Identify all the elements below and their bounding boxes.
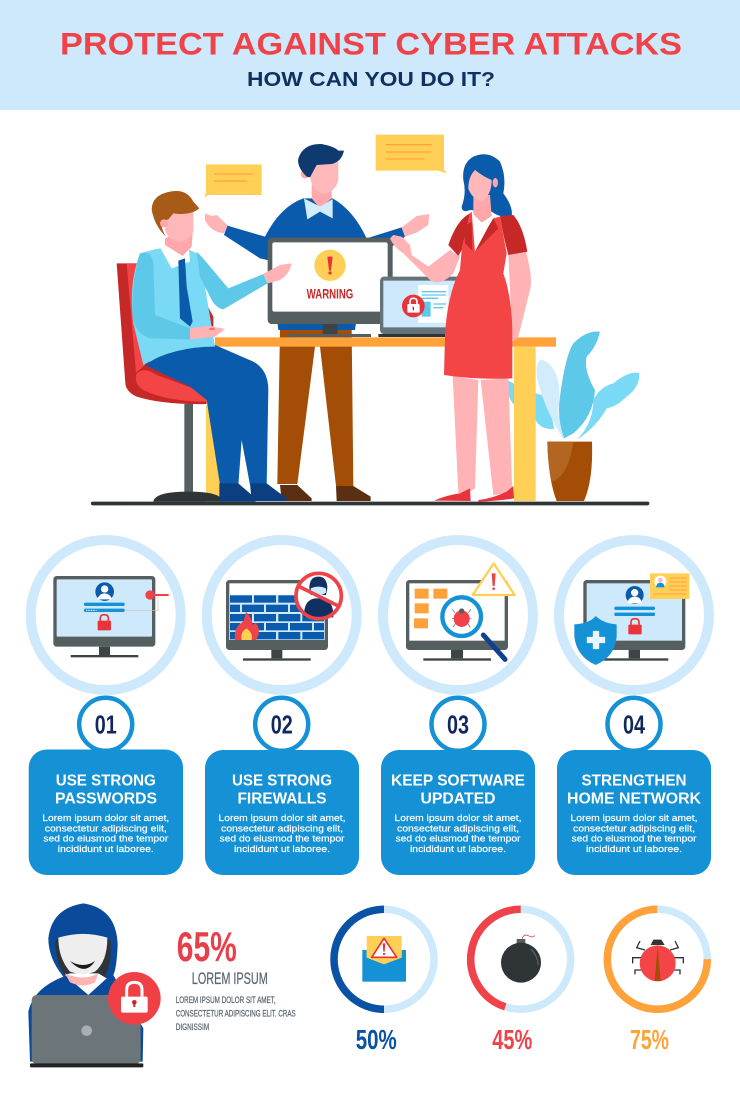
standing man <box>205 144 429 501</box>
icon: alert envelope <box>362 936 406 982</box>
stat: 65 percent <box>176 923 296 1033</box>
number badge 01 <box>79 698 132 751</box>
card: keep software updated: consectetur adipiscing elit, <box>397 823 519 834</box>
number badge 02 <box>255 698 308 751</box>
card: strengthen home network: sed do eiusmod the tempor <box>572 834 696 845</box>
card: strengthen home network: consectetur adipiscing elit, <box>573 823 695 834</box>
card: use strong passwords: USE STRONG <box>56 773 156 790</box>
stat: 65 percent: LOREM IPSUM DOLOR SIT AMET, <box>176 995 276 1006</box>
card: keep software updated <box>381 750 535 875</box>
card: use strong passwords: Lorem ipsum dolor sit amet, <box>42 813 169 824</box>
seated man <box>132 191 292 502</box>
card: use strong firewalls <box>205 750 359 875</box>
step rings <box>31 540 709 690</box>
desk <box>215 337 556 501</box>
title: PROTECT AGAINST CYBER ATTACKS <box>60 26 682 62</box>
number badge 02: 02 <box>271 710 293 740</box>
card: use strong passwords: sed do eiusmod the tempor <box>43 834 168 845</box>
step 1 <box>29 698 183 875</box>
left table leg <box>206 405 221 502</box>
icon: password monitor <box>53 576 169 657</box>
step 2 <box>205 698 359 875</box>
card: strengthen home network: STRENGTHEN <box>582 773 686 790</box>
card: keep software updated: UPDATED <box>420 790 496 807</box>
stat: 65 percent: 65% <box>177 923 237 970</box>
step 3 <box>381 698 535 875</box>
stat: 65 percent: LOREM IPSUM <box>192 969 268 988</box>
card: use strong firewalls: FIREWALLS <box>238 790 326 807</box>
number badge 04 <box>608 698 660 751</box>
card: strengthen home network: incididunt ut laboree. <box>586 844 682 855</box>
card: keep software updated: Lorem ipsum dolor sit amet, <box>394 813 522 824</box>
card: use strong firewalls: USE STRONG <box>232 773 332 790</box>
subtitle: HOW CAN YOU DO IT? <box>247 69 495 91</box>
number badge 04: 04 <box>623 710 645 740</box>
donut: 45 percent: 45% <box>492 1024 532 1055</box>
icon: bug scan monitor <box>406 563 515 661</box>
card: strengthen home network <box>557 750 711 875</box>
donut: 50 percent: 50% <box>356 1024 397 1055</box>
warning monitor: WARNING <box>307 286 353 302</box>
warning monitor <box>268 238 393 337</box>
donut: 45 percent <box>471 909 571 1055</box>
office chair <box>117 263 223 502</box>
stat: 65 percent: CONSECTETUR ADIPISCING ELIT. CRAS <box>176 1009 296 1020</box>
number badge 03: 03 <box>447 710 469 740</box>
standing woman <box>390 154 531 502</box>
donut: 75 percent: 75% <box>630 1024 669 1055</box>
number badge 01: 01 <box>95 710 117 740</box>
icon: home network monitor <box>574 573 689 665</box>
card: use strong passwords <box>29 750 183 875</box>
card: strengthen home network: Lorem ipsum dolor sit amet, <box>570 813 698 824</box>
donut: 50 percent <box>334 909 434 1055</box>
card: strengthen home network: HOME NETWORK <box>567 790 702 807</box>
icon: ladybug <box>633 940 683 981</box>
laptop <box>378 277 462 337</box>
stat: 65 percent: DIGNISSIM <box>176 1022 209 1033</box>
card: keep software updated: incididunt ut laboree. <box>410 844 506 855</box>
step icons <box>53 563 689 665</box>
card: use strong passwords: consectetur adipiscing elit, <box>45 823 167 834</box>
step 4 <box>557 698 711 875</box>
number badge 03 <box>432 698 484 751</box>
card: use strong firewalls: consectetur adipiscing elit, <box>221 823 343 834</box>
card: use strong firewalls: Lorem ipsum dolor sit amet, <box>218 813 346 824</box>
icon: hacker with laptop <box>28 903 161 1067</box>
plant <box>507 331 639 501</box>
icon: bomb <box>501 935 541 983</box>
header band <box>0 0 740 110</box>
speech bubble left <box>204 164 262 197</box>
donut: 75 percent <box>607 909 707 1055</box>
card: use strong firewalls: sed do eiusmod the tempor <box>220 834 344 845</box>
card: use strong passwords: PASSWORDS <box>55 790 157 807</box>
floor line <box>91 502 649 505</box>
card: keep software updated: sed do eiusmod the tempor <box>396 834 520 845</box>
speech bubble right <box>376 135 447 173</box>
office scene illustration <box>91 135 649 505</box>
card: use strong passwords: incididunt ut laboree. <box>58 844 154 855</box>
icon: firewall monitor <box>226 573 341 661</box>
card: keep software updated: KEEP SOFTWARE <box>391 773 525 790</box>
card: use strong firewalls: incididunt ut laboree. <box>234 844 330 855</box>
